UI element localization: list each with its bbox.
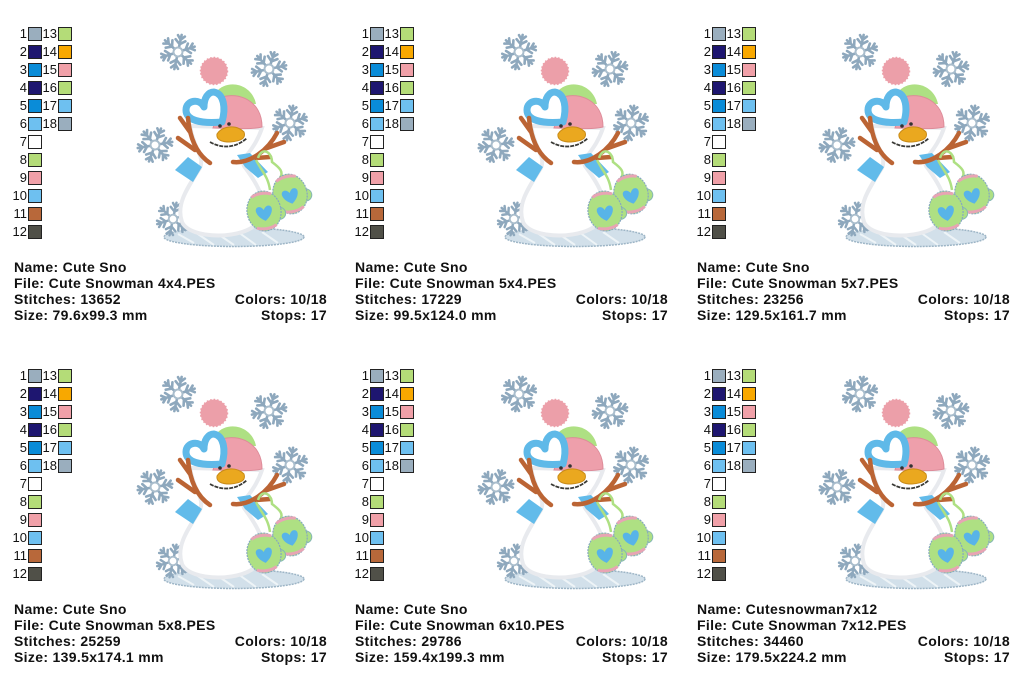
thread colour legend: 9 [704,170,711,185]
thread colour legend: 1 [704,368,711,383]
thread colour legend: 18 [385,116,399,131]
file details: Name: Cute Sno [697,259,810,275]
thread colour legend: 17 [43,98,57,113]
thread colour legend: 10 [697,188,711,203]
thread colour legend: 8 [20,494,27,509]
file details: Size: 179.5x224.2 mm [697,649,847,665]
file details: Stops: 17 [602,307,668,323]
file details: Stops: 17 [261,649,327,665]
file details: Size: 99.5x124.0 mm [355,307,497,323]
thread colour legend: 7 [20,134,27,149]
file details: Stitches: 23256 [697,291,804,307]
thread colour legend: 10 [697,530,711,545]
thread colour legend: 7 [362,476,369,491]
thread colour legend: 14 [727,44,741,59]
thread colour legend: 2 [704,44,711,59]
thread colour legend: 12 [697,566,711,581]
snowman embroidery artwork [136,376,312,590]
file details: Size: 129.5x161.7 mm [697,307,847,323]
thread colour legend: 9 [20,170,27,185]
thread colour legend: 7 [704,476,711,491]
thread colour legend: 10 [355,530,369,545]
panel: Cute Snowman 4x4 [13,26,327,323]
file details: Name: Cutesnowman7x12 [697,601,877,617]
thread colour legend: 2 [362,44,369,59]
thread colour legend: 4 [362,422,369,437]
thread colour legend: 8 [362,152,369,167]
file details: Stitches: 17229 [355,291,462,307]
file details: Name: Cute Sno [355,601,468,617]
snowman embroidery artwork [478,34,654,248]
file details: Stitches: 25259 [14,633,121,649]
thread colour legend: 2 [20,44,27,59]
thread colour legend: 12 [13,224,27,239]
thread colour legend: 18 [727,458,741,473]
thread colour legend: 13 [727,368,741,383]
thread colour legend [355,368,414,581]
thread colour legend: 3 [362,404,369,419]
thread colour legend: 16 [727,80,741,95]
file details [14,259,327,323]
panel: Cute Snowman 6x10 [355,368,668,665]
thread colour legend: 4 [20,422,27,437]
file details: Stops: 17 [944,307,1010,323]
file details: Colors: 10/18 [576,291,668,307]
thread colour legend: 13 [43,368,57,383]
thread colour legend: 14 [727,386,741,401]
thread colour legend: 8 [704,494,711,509]
file details: Stitches: 13652 [14,291,121,307]
thread colour legend: 16 [43,422,57,437]
file details [697,259,1010,323]
panel: Cute Snowman 7x12 [697,368,1010,665]
thread colour legend: 5 [20,98,27,113]
thread colour legend: 15 [43,62,57,77]
thread colour legend: 17 [727,98,741,113]
thread colour legend: 6 [20,458,27,473]
thread colour legend: 16 [727,422,741,437]
snowman embroidery artwork [818,376,994,590]
thread colour legend: 15 [727,404,741,419]
thread colour legend: 14 [385,386,399,401]
thread colour legend: 2 [20,386,27,401]
file details [14,601,327,665]
thread colour legend: 13 [43,26,57,41]
thread colour legend: 16 [43,80,57,95]
file details: File: Cute Snowman 5x8.PES [14,617,216,633]
panel: Cute Snowman 5x7 [697,26,1010,323]
thread colour legend: 5 [704,440,711,455]
thread colour legend: 4 [362,80,369,95]
thread colour legend: 12 [355,224,369,239]
thread colour legend: 2 [362,386,369,401]
thread colour legend: 10 [13,530,27,545]
thread colour legend: 6 [362,458,369,473]
thread colour legend: 14 [43,44,57,59]
thread colour legend: 7 [20,476,27,491]
thread colour legend [13,26,72,239]
file details: File: Cute Snowman 5x4.PES [355,275,557,291]
thread colour legend: 13 [727,26,741,41]
thread colour legend: 9 [704,512,711,527]
thread colour legend: 11 [698,548,711,563]
thread colour legend: 6 [704,116,711,131]
file details: Stitches: 29786 [355,633,462,649]
thread colour legend: 12 [355,566,369,581]
file details: File: Cute Snowman 4x4.PES [14,275,216,291]
thread colour legend: 17 [727,440,741,455]
snowman embroidery artwork [818,34,994,248]
file details: Stops: 17 [602,649,668,665]
snowman embroidery artwork [478,376,654,590]
file details [355,601,668,665]
thread colour legend: 10 [355,188,369,203]
thread colour legend: 18 [43,458,57,473]
thread colour legend: 18 [43,116,57,131]
thread colour legend: 6 [362,116,369,131]
file details: File: Cute Snowman 5x7.PES [697,275,899,291]
thread colour legend: 13 [385,368,399,383]
file details: Name: Cute Sno [14,259,127,275]
thread colour legend: 7 [704,134,711,149]
thread colour legend: 6 [704,458,711,473]
thread colour legend: 9 [20,512,27,527]
thread colour legend: 17 [43,440,57,455]
thread colour legend: 8 [362,494,369,509]
thread colour legend: 15 [385,62,399,77]
thread colour legend: 1 [362,368,369,383]
file details: Size: 159.4x199.3 mm [355,649,505,665]
thread colour legend: 14 [43,386,57,401]
file details: Colors: 10/18 [918,633,1010,649]
thread colour legend: 15 [727,62,741,77]
thread colour legend: 15 [385,404,399,419]
thread colour legend: 11 [698,206,711,221]
thread colour legend: 8 [704,152,711,167]
thread colour legend: 17 [385,440,399,455]
thread colour legend: 10 [13,188,27,203]
thread colour legend: 1 [362,26,369,41]
thread colour legend: 8 [20,152,27,167]
thread colour legend: 11 [356,206,369,221]
panel: Cute Snowman 5x4 [355,26,668,323]
file details: Name: Cute Sno [14,601,127,617]
thread colour legend: 5 [362,98,369,113]
thread colour legend: 9 [362,512,369,527]
file details: Colors: 10/18 [576,633,668,649]
thread colour legend: 13 [385,26,399,41]
thread colour legend [697,26,756,239]
thread colour legend: 1 [20,26,27,41]
file details: Stitches: 34460 [697,633,804,649]
file details: Colors: 10/18 [235,633,327,649]
thread colour legend [697,368,756,581]
file details: File: Cute Snowman 7x12.PES [697,617,907,633]
thread colour legend: 1 [20,368,27,383]
thread colour legend: 18 [727,116,741,131]
file details: Size: 79.6x99.3 mm [14,307,148,323]
thread colour legend: 7 [362,134,369,149]
thread colour legend: 14 [385,44,399,59]
thread colour legend: 1 [704,26,711,41]
file details: Name: Cute Sno [355,259,468,275]
thread colour legend: 12 [697,224,711,239]
thread colour legend: 18 [385,458,399,473]
file details: Size: 139.5x174.1 mm [14,649,164,665]
file details: Stops: 17 [261,307,327,323]
thread colour legend: 2 [704,386,711,401]
thread colour legend: 16 [385,80,399,95]
panel: Cute Snowman 5x8 [13,368,327,665]
thread colour legend: 3 [362,62,369,77]
thread colour legend [355,26,414,239]
thread colour legend: 11 [14,548,27,563]
file details [697,601,1010,665]
thread colour legend: 9 [362,170,369,185]
thread colour legend: 12 [13,566,27,581]
thread colour legend: 6 [20,116,27,131]
thread colour legend: 15 [43,404,57,419]
thread colour legend: 4 [20,80,27,95]
thread colour legend: 3 [704,404,711,419]
file details: Stops: 17 [944,649,1010,665]
thread colour legend: 17 [385,98,399,113]
thread colour legend: 5 [362,440,369,455]
file details [355,259,668,323]
thread colour legend: 3 [704,62,711,77]
file details: Colors: 10/18 [918,291,1010,307]
thread colour legend: 4 [704,422,711,437]
thread colour legend: 4 [704,80,711,95]
file details: File: Cute Snowman 6x10.PES [355,617,565,633]
file details: Colors: 10/18 [235,291,327,307]
thread colour legend: 3 [20,62,27,77]
thread colour legend: 5 [20,440,27,455]
thread colour legend: 11 [14,206,27,221]
thread colour legend [13,368,72,581]
thread colour legend: 5 [704,98,711,113]
thread colour legend: 3 [20,404,27,419]
snowman embroidery artwork [136,34,312,248]
thread colour legend: 11 [356,548,369,563]
thread colour legend: 16 [385,422,399,437]
